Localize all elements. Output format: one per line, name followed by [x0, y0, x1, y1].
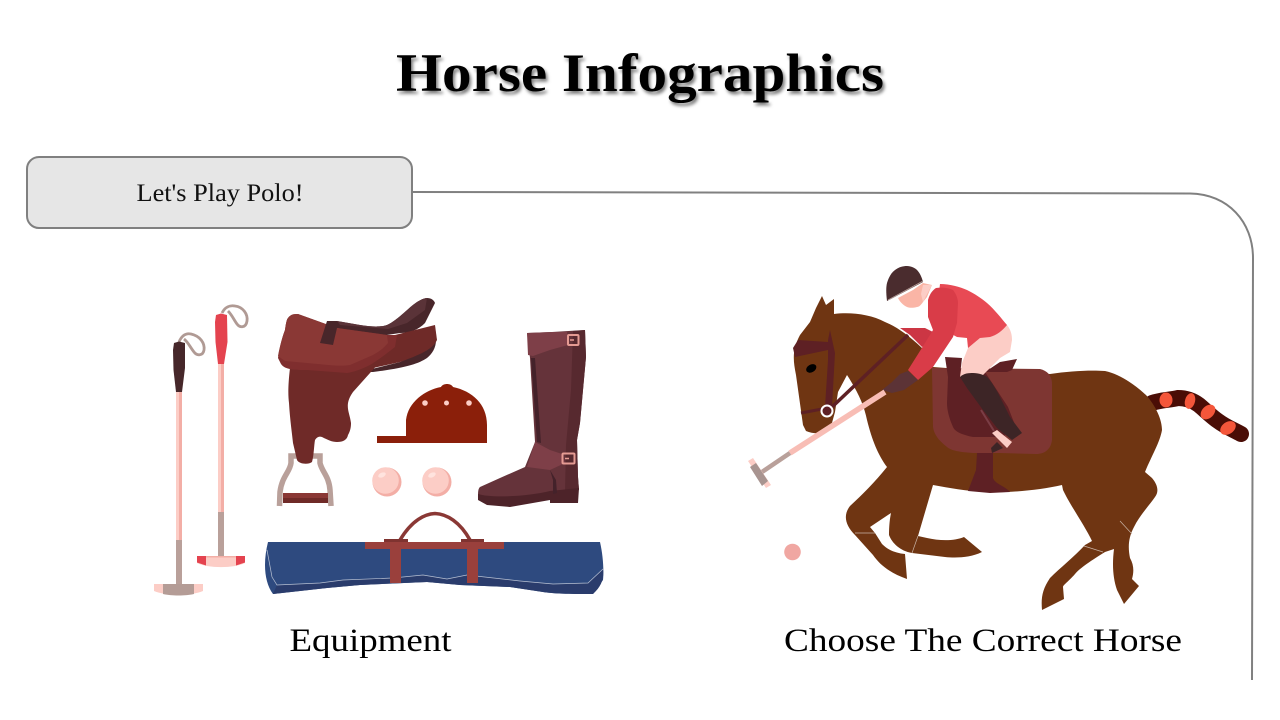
title: Horse Infographics	[396, 43, 884, 103]
rider torso	[935, 284, 1007, 348]
panel: horse and rider illustration	[748, 266, 1241, 610]
rider glove	[882, 371, 918, 393]
label: Equipment: Equipment	[290, 623, 452, 659]
callout: Let's Play Polo	[27, 157, 412, 228]
icon: stirrup	[280, 456, 331, 506]
bridle	[793, 330, 908, 416]
panel: equipment illustration	[154, 298, 603, 596]
saddle pad	[932, 357, 1052, 493]
rider head and helmet	[886, 266, 932, 308]
horse body	[794, 296, 1162, 610]
icon: saddle	[278, 298, 437, 464]
rider far arm	[900, 328, 933, 347]
label: Choose The Correct Horse: Choose The Correct Horse	[784, 623, 1182, 659]
icon: braided tail	[1152, 392, 1241, 438]
icon: polo stick red	[197, 306, 247, 567]
icon: riding boot	[478, 330, 586, 507]
icon: polo stick dark	[154, 334, 204, 596]
leg and face markings	[855, 521, 1132, 553]
ball	[784, 544, 801, 560]
callout: Let's Play Polo: Let's Play Polo!	[136, 180, 304, 207]
icon: polo helmet	[377, 384, 487, 443]
polo mallet	[748, 392, 885, 488]
connector line	[412, 192, 1253, 680]
rider boot	[960, 373, 1022, 453]
rider thigh	[960, 325, 1012, 377]
icon: mallet bag	[265, 514, 603, 594]
icon: polo balls	[372, 467, 452, 496]
rider near arm	[908, 288, 958, 380]
